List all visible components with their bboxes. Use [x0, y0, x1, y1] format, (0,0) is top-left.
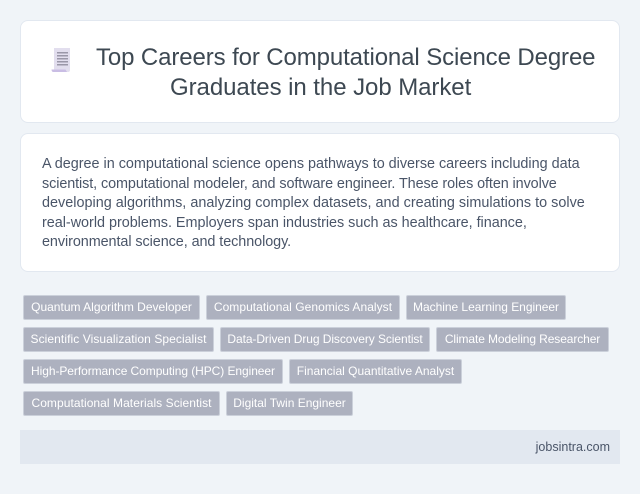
- tag: Machine Learning Engineer: [413, 300, 559, 314]
- tag: [206, 295, 400, 320]
- tag: [289, 359, 462, 384]
- text block: intro paragraph: scientist, computational modeler, and software engineer. These roles often involve: [42, 176, 557, 192]
- tag: Climate Modeling Researcher: [445, 332, 600, 346]
- tag: Digital Twin Engineer: [233, 396, 346, 410]
- title: Top Careers for Computational Science Degree: [96, 44, 595, 71]
- tag: [23, 295, 200, 320]
- panel: career tags: [23, 295, 609, 416]
- tag: Data-Driven Drug Discovery Scientist: [227, 332, 423, 346]
- tag: [220, 327, 430, 352]
- title: [96, 44, 595, 101]
- tag: Scientific Visualization Specialist: [30, 332, 206, 346]
- tag: High-Performance Computing (HPC) Engineer: [31, 364, 275, 378]
- tag: [436, 327, 609, 352]
- tag: Financial Quantitative Analyst: [297, 364, 454, 378]
- text block: intro paragraph: environmental science, and technology.: [42, 234, 291, 250]
- text block: intro paragraph: [42, 156, 585, 250]
- title: Graduates in the Job Market: [170, 74, 471, 101]
- tag: Computational Materials Scientist: [31, 396, 212, 410]
- panel: introduction text: [20, 133, 620, 272]
- footer: [20, 430, 620, 464]
- tag: [406, 295, 566, 320]
- tag: Computational Genomics Analyst: [214, 300, 392, 314]
- text block: intro paragraph: A degree in computational science opens pathways to diverse careers including data: [42, 156, 580, 172]
- text block: intro paragraph: real-world problems. Employers span industries such as healthcare, finance,: [42, 214, 527, 230]
- tag: [23, 391, 220, 416]
- tag: Quantum Algorithm Developer: [31, 300, 192, 314]
- tag: [23, 327, 214, 352]
- tag: [226, 391, 353, 416]
- panel: header: [20, 20, 620, 123]
- icon: document scroll: [52, 48, 70, 72]
- tag: [23, 359, 283, 384]
- footer source text: jobsintra.com: [536, 440, 610, 454]
- text block: intro paragraph: developing algorithms, analyzing complex datasets, and creating simulations to solve: [42, 195, 585, 211]
